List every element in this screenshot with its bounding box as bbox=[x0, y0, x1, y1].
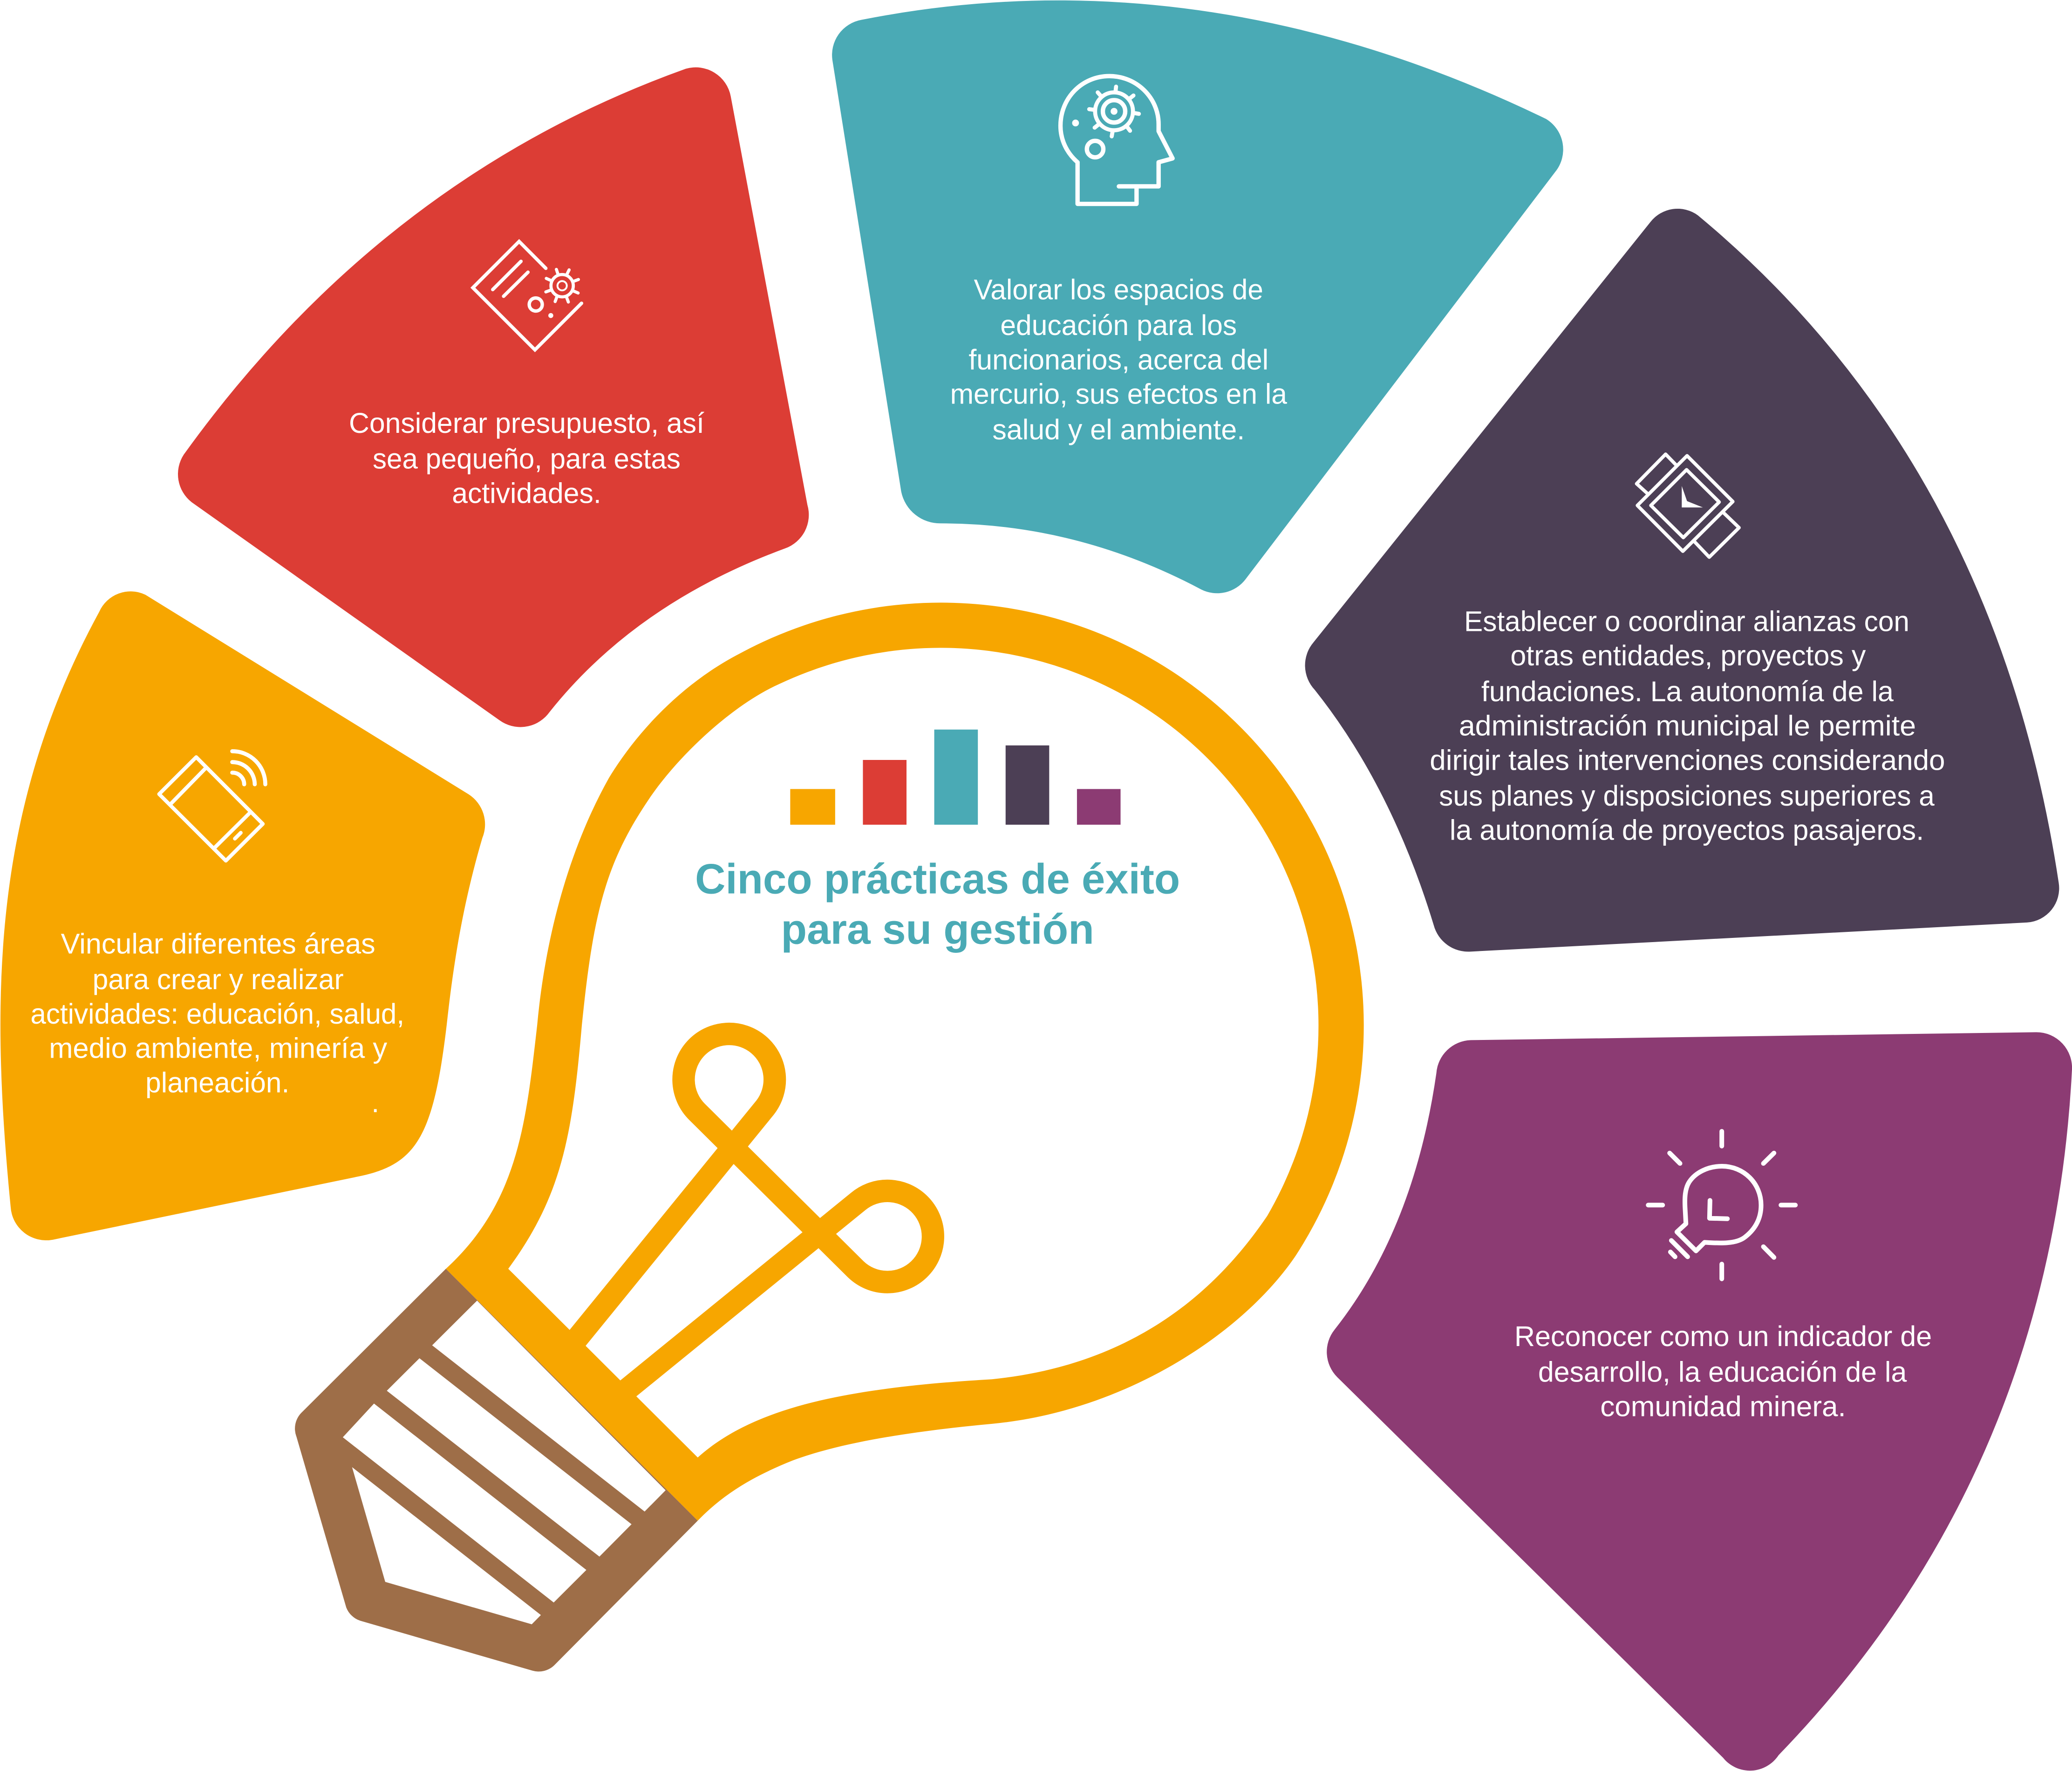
text: vincular: actividades: educación, salud, bbox=[30, 998, 404, 1030]
bulb base bbox=[295, 1269, 698, 1672]
text: presupuesto: actividades. bbox=[452, 477, 601, 509]
text: presupuesto: sea pequeño, para estas bbox=[373, 443, 681, 475]
text: alianzas: fundaciones. La autonomía de la bbox=[1481, 676, 1894, 707]
title: Cinco prácticas de éxito bbox=[695, 856, 1180, 903]
panel: alianzas bbox=[1305, 209, 2059, 952]
icon: document with gear bbox=[473, 241, 581, 350]
icon: light bulb with rays bbox=[1648, 1131, 1795, 1279]
text: educación bbox=[950, 274, 1287, 445]
text: vincular: medio ambiente, minería y bbox=[49, 1033, 388, 1064]
title: para su gestión bbox=[781, 906, 1094, 953]
panel: presupuesto bbox=[178, 68, 809, 727]
text: educación: educación para los bbox=[1000, 309, 1237, 341]
panel: educación bbox=[832, 0, 1563, 593]
bulb glass outline bbox=[446, 602, 1364, 1521]
panel: vincular áreas bbox=[0, 591, 485, 1240]
icon: head with gear bbox=[1061, 76, 1172, 204]
text: indicador: desarrollo, la educación de la bbox=[1538, 1356, 1907, 1388]
text: alianzas bbox=[1430, 605, 1945, 846]
text: alianzas: sus planes y disposiciones superiores a bbox=[1439, 780, 1935, 812]
text: vincular: para crear y realizar bbox=[93, 964, 344, 995]
panel: indicador de desarrollo bbox=[1327, 1032, 2072, 1771]
illustration: light bulb bbox=[295, 602, 1364, 1672]
text: alianzas: Establecer o coordinar alianzas con bbox=[1464, 605, 1909, 637]
text: presupuesto: Considerar presupuesto, así bbox=[349, 407, 704, 439]
text: alianzas: la autonomía de proyectos pasajeros. bbox=[1450, 814, 1924, 846]
text: alianzas: administración municipal le permite bbox=[1459, 710, 1916, 742]
icon: phone bbox=[159, 751, 266, 861]
text: vincular: . bbox=[371, 1087, 379, 1118]
text: presupuesto bbox=[349, 407, 704, 509]
text: indicador: Reconocer como un indicador de bbox=[1514, 1320, 1932, 1352]
text: educación: mercurio, sus efectos en la bbox=[950, 378, 1287, 410]
icon: watch bbox=[1636, 454, 1739, 557]
text: alianzas: dirigir tales intervenciones considerando bbox=[1430, 744, 1945, 776]
text: vincular: Vincular diferentes áreas bbox=[61, 928, 375, 960]
bar chart bbox=[790, 730, 1121, 825]
text: educación: funcionarios, acerca del bbox=[968, 344, 1268, 376]
text: vincular: planeación. bbox=[145, 1067, 289, 1098]
text: educación: Valorar los espacios de bbox=[974, 274, 1263, 305]
text: indicador: comunidad minera. bbox=[1600, 1390, 1846, 1422]
filament clip bbox=[568, 1034, 933, 1400]
text: educación: salud y el ambiente. bbox=[992, 414, 1245, 445]
text: vincular bbox=[30, 928, 404, 1118]
text: alianzas: otras entidades, proyectos y bbox=[1510, 640, 1866, 671]
text: indicador bbox=[1514, 1320, 1932, 1422]
title bbox=[695, 856, 1180, 953]
